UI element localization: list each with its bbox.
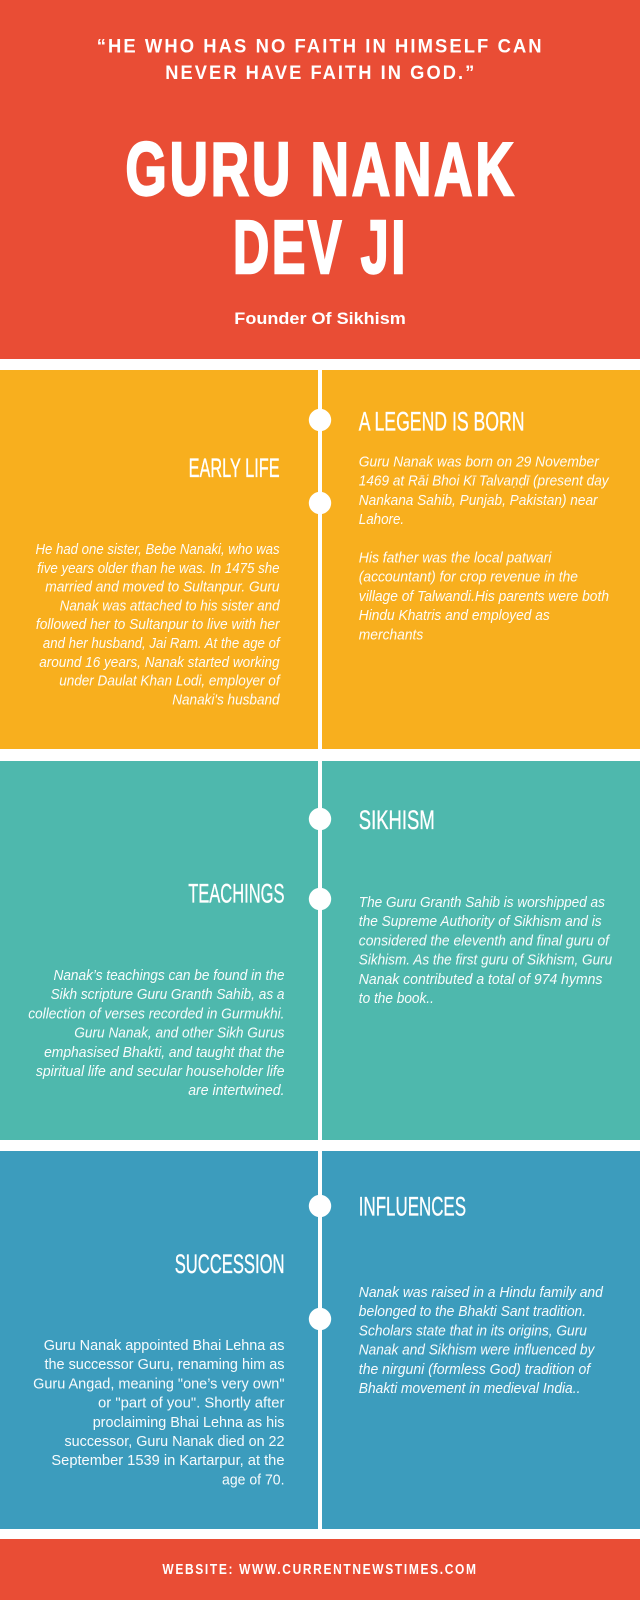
text block: succession: September 1539 in Kartarpur, at the bbox=[51, 1452, 285, 1469]
text block: influences: Bhakti movement in medieval India.. bbox=[359, 1380, 580, 1397]
text block: early life: Nanaki's husband bbox=[172, 691, 280, 708]
text block: succession: proclaiming Bhai Lehna as his bbox=[93, 1414, 284, 1431]
text block: teachings: Guru Nanak, and other Sikh Gurus bbox=[74, 1025, 285, 1042]
timeline dot: influences bbox=[309, 1195, 331, 1217]
quote: NEVER HAVE FAITH IN GOD.” bbox=[165, 62, 476, 84]
text block: sikhism bbox=[359, 894, 613, 1007]
text block: a legend is born: Guru Nanak was born on 29 November bbox=[359, 454, 600, 471]
text block: sikhism: considered the eleventh and final guru of bbox=[359, 932, 611, 949]
text block: succession: the successor Guru, renaming him as bbox=[44, 1356, 284, 1373]
text block: early life: He had one sister, Bebe Nanaki, who was bbox=[36, 541, 280, 558]
text block: early life: married and moved to Sultanpur. Guru bbox=[45, 579, 280, 596]
text block: early life: Nanak was attached to his sister and bbox=[60, 597, 280, 614]
panel: footer bbox=[0, 1539, 640, 1600]
text block: influences: the nirguni (formless God) tradition of bbox=[359, 1361, 592, 1378]
title: DEV JI bbox=[233, 205, 408, 289]
panel: teachings and sikhism bbox=[0, 761, 640, 1140]
text block: influences: Nanak and Sikhism were influenced by bbox=[359, 1342, 596, 1359]
timeline dot: succession bbox=[309, 1308, 331, 1330]
heading: succession: SUCCESSION bbox=[175, 1249, 284, 1279]
text block: teachings: spiritual life and secular householder life bbox=[36, 1063, 285, 1080]
quote: “HE WHO HAS NO FAITH IN HIMSELF CAN bbox=[97, 36, 544, 58]
heading: teachings: TEACHINGS bbox=[188, 878, 284, 908]
text block: succession bbox=[33, 1337, 285, 1488]
text block: succession: successor, Guru Nanak died on 22 bbox=[64, 1433, 284, 1450]
text block: teachings bbox=[28, 967, 285, 1099]
text block: influences: belonged to the Bhakti Sant tradition. bbox=[359, 1303, 586, 1320]
text block: a legend is born: village of Talwandi.His parents were both bbox=[359, 588, 609, 605]
text block: teachings: are intertwined. bbox=[188, 1082, 284, 1099]
text block: sikhism: Nanak contributed a total of 974 hymns bbox=[359, 971, 603, 988]
heading: a legend is born: A LEGEND IS BORN bbox=[359, 407, 524, 437]
timeline dot: sikhism bbox=[309, 808, 331, 830]
text block: teachings: collection of verses recorded in Gurmukhi. bbox=[28, 1005, 284, 1022]
text block: early life bbox=[36, 541, 281, 708]
panel: header bbox=[0, 0, 640, 359]
text block: early life: under Daulat Khan Lodi, employer of bbox=[59, 673, 281, 690]
text block: a legend is born: His father was the local patwari bbox=[359, 549, 552, 566]
text block: influences bbox=[359, 1284, 604, 1397]
text block: influences: Scholars state that in its origins, Guru bbox=[359, 1322, 588, 1339]
text block: early life: five years older than he was. In 1475 she bbox=[37, 560, 280, 577]
timeline dot: a legend is born bbox=[309, 409, 331, 431]
text block: a legend is born: (accountant) for crop revenue in the bbox=[359, 569, 578, 586]
text block: influences: Nanak was raised in a Hindu family and bbox=[359, 1284, 604, 1301]
heading: influences: INFLUENCES bbox=[359, 1192, 466, 1222]
text block: early life: and her husband, Jai Ram. At the age of bbox=[43, 635, 281, 652]
text block: a legend is born bbox=[359, 454, 610, 643]
text block: a legend is born: 1469 at Rāi Bhoi Kī Talvaṇḍī (present day bbox=[359, 473, 610, 490]
text block: sikhism: to the book.. bbox=[359, 990, 434, 1007]
text block: a legend is born: Lahore. bbox=[359, 511, 404, 528]
heading: sikhism: SIKHISM bbox=[359, 805, 435, 835]
text block: succession: or "part of you". Shortly after bbox=[98, 1395, 285, 1412]
text block: succession: Guru Angad, meaning "one’s very own" bbox=[33, 1375, 284, 1392]
text block: early life: around 16 years, Nanak started working bbox=[39, 654, 280, 671]
timeline: vertical line with dots bbox=[309, 370, 331, 1529]
panel: succession and influences bbox=[0, 1151, 640, 1529]
text block: succession: age of 70. bbox=[222, 1471, 284, 1488]
title bbox=[126, 127, 516, 289]
heading: early life: EARLY LIFE bbox=[189, 453, 280, 483]
text block: teachings: Nanak’s teachings can be found in the bbox=[54, 967, 284, 984]
text block: a legend is born: Nankana Sahib, Punjab, Pakistan) near bbox=[359, 492, 599, 509]
text block: early life: followed her to Sultanpur to live with her bbox=[36, 616, 281, 633]
text block: sikhism: Sikhism. As the first guru of Sikhism, Guru bbox=[359, 952, 613, 969]
text block: sikhism: The Guru Granth Sahib is worshipped as bbox=[359, 894, 605, 911]
text block: succession: Guru Nanak appointed Bhai Lehna as bbox=[44, 1337, 285, 1354]
text block: teachings: Sikh scripture Guru Granth Sahib, as a bbox=[51, 986, 284, 1003]
subtitle: Founder Of Sikhism bbox=[234, 309, 406, 328]
panel: early life and birth bbox=[0, 370, 640, 749]
text block: a legend is born: Hindu Khatris and employed as bbox=[359, 607, 550, 624]
timeline dot: early life bbox=[309, 492, 331, 514]
text block: a legend is born: merchants bbox=[359, 626, 424, 643]
text block: teachings: emphasised Bhakti, and taught that the bbox=[44, 1044, 284, 1061]
text block: sikhism: the Supreme Authority of Sikhism and is bbox=[359, 913, 602, 930]
quote bbox=[97, 36, 544, 84]
website line: WEBSITE: WWW.CURRENTNEWSTIMES.COM bbox=[162, 1562, 478, 1578]
timeline dot: teachings bbox=[309, 888, 331, 910]
